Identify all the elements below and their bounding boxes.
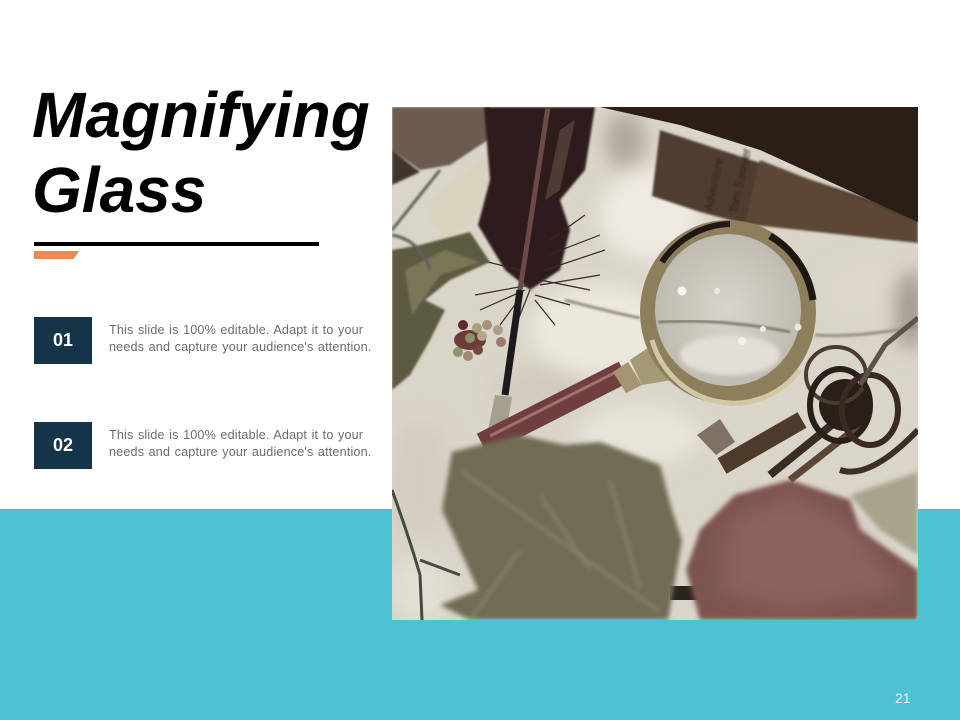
title [32,79,370,226]
title underline [34,242,319,246]
text block 01: needs and capture your audience's attention. [109,340,371,354]
handle [482,372,624,444]
quill shaft [485,107,548,445]
page number: 21 [895,690,911,706]
orange accent [34,251,79,259]
text block 02 [109,428,371,458]
green leaf left [392,170,490,390]
keys [697,318,918,480]
magnifying glass [482,220,816,444]
book: lower brown spine: Adventure [701,156,726,213]
photo: magnifying glass still life [392,107,918,620]
title: Glass [32,154,206,226]
title: Magnifying [32,79,370,151]
number badge 01: 01 [53,330,73,350]
fur background [390,107,926,620]
lens [655,234,801,386]
feather vane [475,107,605,340]
lens highlights [678,286,686,296]
pink leaf [686,480,918,620]
book: lower brown spine: Tom Sawyer [726,147,754,215]
text block 02: needs and capture your audience's attention. [109,444,371,458]
metal ring [640,220,816,404]
number badge 01 [34,317,92,364]
text block 02: This slide is 100% editable. Adapt it to your [109,428,363,442]
stem bottom left [392,490,460,620]
cream leaf [428,155,494,238]
berries [453,320,506,361]
number badge 02: 02 [53,435,73,455]
top left leaf [392,107,490,185]
dark stem between leaves [670,586,698,600]
right green leaf [850,472,918,555]
book: dark top cover [600,107,918,222]
number badge 02 [34,422,92,469]
teal background band [0,509,960,720]
book: lower brown spine [652,130,918,243]
text block 01: This slide is 100% editable. Adapt it to your [109,323,363,337]
ferrule [613,362,642,393]
big green leaf [440,435,682,620]
text block 01 [109,323,371,354]
